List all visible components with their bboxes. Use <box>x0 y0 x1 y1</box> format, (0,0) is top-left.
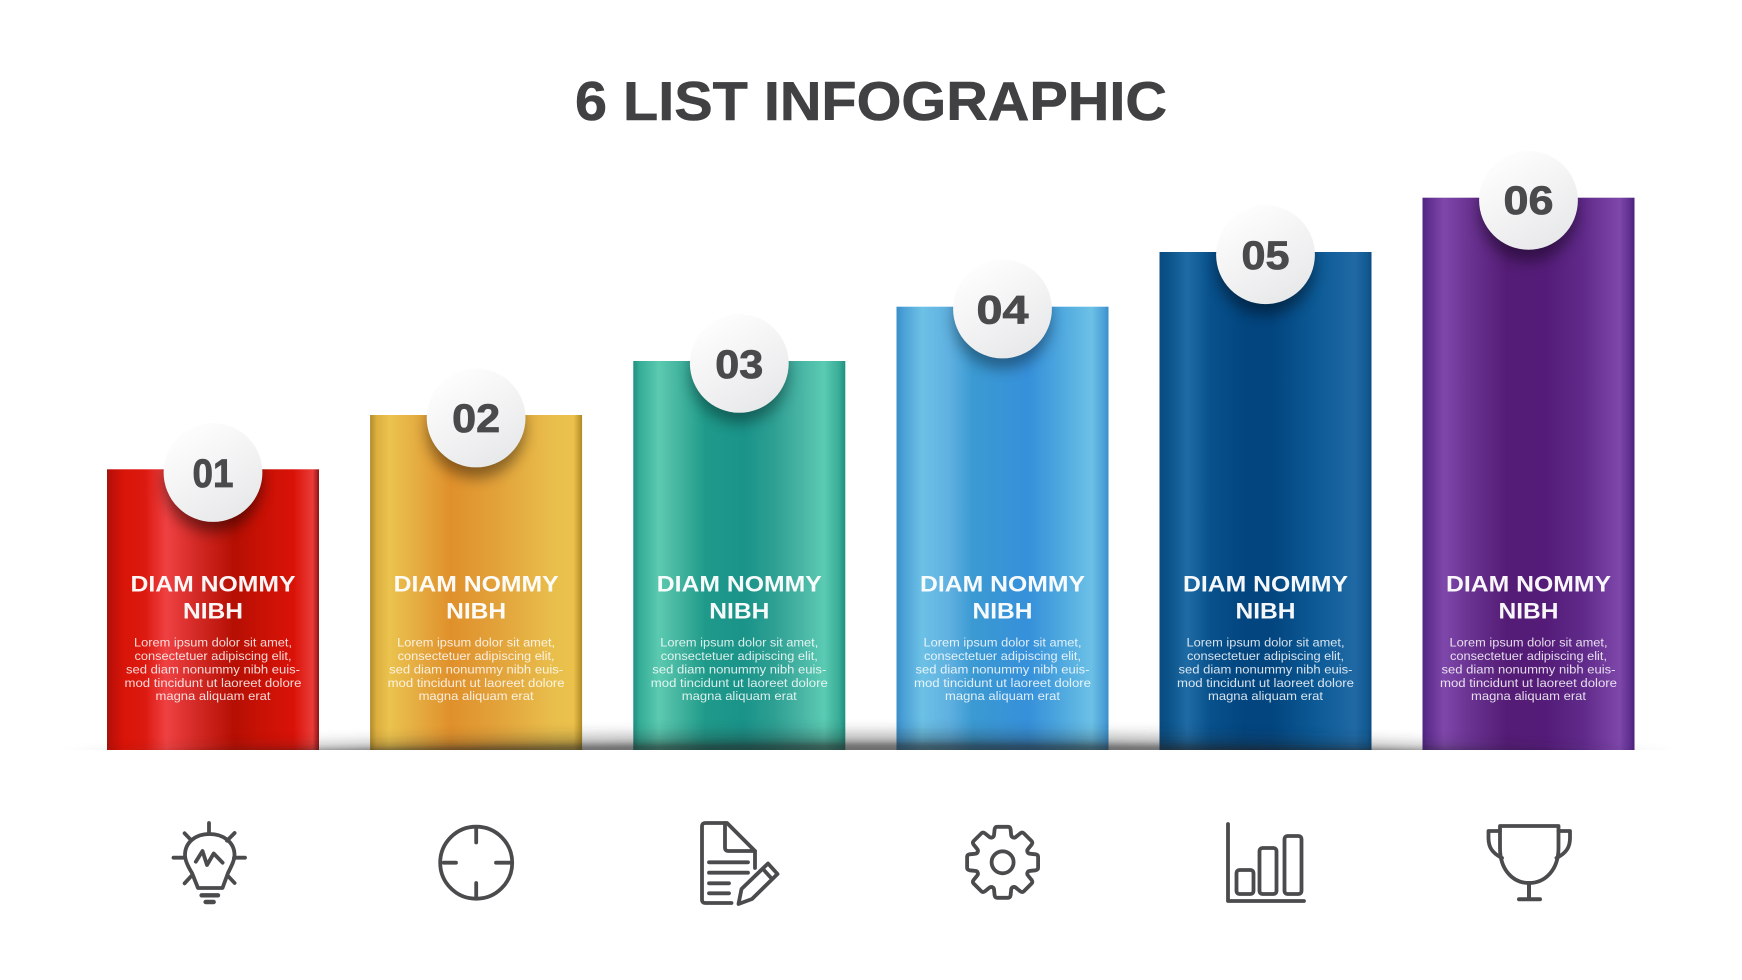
icon: trophy <box>1488 826 1570 899</box>
body text 06: sed diam nonummy nibh euis- <box>1442 662 1616 676</box>
body text 04: mod tincidunt ut laoreet dolore <box>914 676 1091 690</box>
number badge 02 <box>427 369 526 467</box>
body text 06: mod tincidunt ut laoreet dolore <box>1440 676 1617 690</box>
body text 03: magna aliquam erat <box>682 689 797 703</box>
body text 05: consectetuer adipiscing elit, <box>1187 649 1344 663</box>
heading 05: NIBH <box>1236 598 1296 623</box>
icon: bar chart <box>1228 824 1304 901</box>
heading 01: DIAM NOMMY <box>130 572 296 597</box>
number badge 03: 03 <box>715 343 763 387</box>
number badge 01: 01 <box>192 452 234 496</box>
number badge 04: 04 <box>976 288 1029 332</box>
body text 03: sed diam nonummy nibh euis- <box>652 662 826 676</box>
body text 01: consectetuer adipiscing elit, <box>134 649 292 663</box>
body text 06: Lorem ipsum dolor sit amet, <box>1450 636 1608 650</box>
body text 02: sed diam nonummy nibh euis- <box>389 662 563 676</box>
body text 05: sed diam nonummy nibh euis- <box>1178 662 1352 676</box>
body text 05: magna aliquam erat <box>1208 689 1324 703</box>
heading 03: DIAM NOMMY <box>657 572 822 597</box>
body text 03: mod tincidunt ut laoreet dolore <box>651 676 828 690</box>
body text 03: Lorem ipsum dolor sit amet, <box>660 636 818 650</box>
heading 06: NIBH <box>1498 598 1558 623</box>
ground shadow <box>60 733 1680 758</box>
body text 02: magna aliquam erat <box>419 689 534 703</box>
icon: light bulb <box>174 823 245 902</box>
body text 05: Lorem ipsum dolor sit amet, <box>1186 636 1344 650</box>
body text 06: consectetuer adipiscing elit, <box>1450 649 1607 663</box>
heading 04: DIAM NOMMY <box>920 572 1085 597</box>
number badge 06: 06 <box>1504 179 1554 223</box>
panel: bar 01 <box>107 469 319 750</box>
number badge 01 <box>164 423 262 522</box>
heading 05: DIAM NOMMY <box>1183 572 1348 597</box>
body text 04: sed diam nonummy nibh euis- <box>916 662 1090 676</box>
body text 02: Lorem ipsum dolor sit amet, <box>397 636 555 650</box>
body text 06: magna aliquam erat <box>1471 689 1587 703</box>
body text 01: magna aliquam erat <box>156 689 271 703</box>
body text 02: mod tincidunt ut laoreet dolore <box>388 676 565 690</box>
panel: bar 05 <box>1160 217 1372 750</box>
panel: bar 02 <box>370 380 582 750</box>
body text 05: mod tincidunt ut laoreet dolore <box>1177 676 1354 690</box>
number badge 03 <box>690 314 789 413</box>
number badge 05: 05 <box>1242 234 1290 278</box>
icon: gear <box>967 827 1038 898</box>
number badge 04 <box>953 260 1052 358</box>
heading 04: NIBH <box>972 598 1032 623</box>
panel: bar 03 <box>633 325 845 750</box>
body text 01: Lorem ipsum dolor sit amet, <box>134 636 292 650</box>
heading 06: DIAM NOMMY <box>1446 572 1611 597</box>
panel: bar 06 <box>1422 163 1634 750</box>
body text 03: consectetuer adipiscing elit, <box>661 649 818 663</box>
number badge 06 <box>1479 151 1578 250</box>
heading 02: DIAM NOMMY <box>394 572 559 597</box>
heading 03: NIBH <box>709 598 769 623</box>
heading 01: NIBH <box>183 598 243 623</box>
number badge 02: 02 <box>452 397 500 441</box>
body text 04: consectetuer adipiscing elit, <box>924 649 1081 663</box>
body text 04: Lorem ipsum dolor sit amet, <box>924 636 1082 650</box>
panel: bar 04 <box>896 271 1108 750</box>
body text 02: consectetuer adipiscing elit, <box>398 649 555 663</box>
body text 01: mod tincidunt ut laoreet dolore <box>124 676 302 690</box>
icon: target <box>440 827 512 899</box>
body text 04: magna aliquam erat <box>945 689 1061 703</box>
icon: document with pencil <box>702 823 778 904</box>
number badge 05 <box>1216 205 1315 304</box>
heading 02: NIBH <box>446 598 506 623</box>
body text 01: sed diam nonummy nibh euis- <box>126 662 300 676</box>
title: 6 LIST INFOGRAPHIC <box>575 70 1167 132</box>
